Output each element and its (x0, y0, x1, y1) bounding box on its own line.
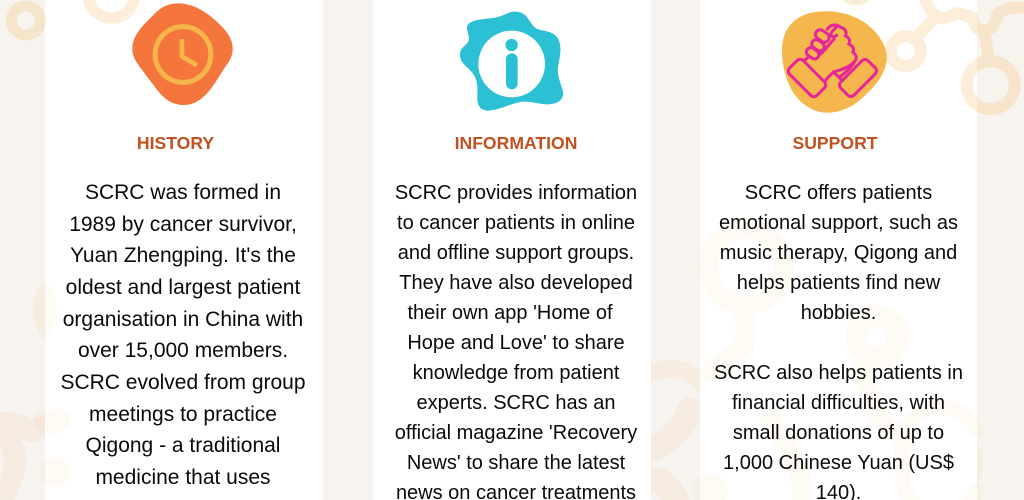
text: support: hobbies. (801, 302, 876, 324)
text: support: financial difficulties, with (732, 392, 945, 414)
text: support: helps patients find new (737, 272, 940, 294)
text: information (395, 182, 638, 500)
heading: information: INFORMATION (455, 132, 577, 152)
text: information: News' to share the latest (407, 452, 625, 474)
text: information: and offline support groups. (398, 242, 634, 264)
heading: support: SUPPORT (792, 132, 878, 152)
text: support: small donations of up to (733, 422, 944, 444)
text: information: SCRC provides information (395, 182, 637, 204)
text: history: Qigong - a traditional (86, 434, 280, 457)
text: information: They have also developed (399, 272, 633, 294)
text: history: organisation in China with (63, 308, 303, 331)
text: history: over 15,000 members. (78, 339, 288, 362)
text: support: emotional support, such as (719, 212, 958, 234)
heading: history: HISTORY (137, 132, 214, 152)
text: information: knowledge from patient (413, 362, 619, 384)
text: support: SCRC also helps patients in (714, 362, 963, 384)
text: history: SCRC was formed in (85, 181, 281, 204)
panel: support (700, 0, 977, 500)
text: support: music therapy, Qigong and (720, 242, 957, 264)
text: information: experts. SCRC has an (416, 392, 615, 414)
text: history: 1989 by cancer survivor, (69, 213, 297, 236)
panel: history (45, 0, 323, 500)
text: support: 1,000 Chinese Yuan (US$ (723, 452, 954, 474)
text: history: medicine that uses (95, 466, 271, 489)
text: support: SCRC offers patients (745, 182, 932, 204)
text: information: their own app 'Home of (407, 302, 613, 324)
text: history (60, 181, 306, 489)
text: support (714, 182, 963, 500)
text: history: Yuan Zhengping. It's the (70, 244, 296, 267)
text: history: oldest and largest patient (66, 276, 300, 299)
text: history: SCRC evolved from group (60, 371, 306, 394)
panel: information (373, 0, 651, 500)
text: information: Hope and Love' to share (407, 332, 625, 354)
text: information: official magazine 'Recovery (395, 422, 637, 444)
text: history: meetings to practice (89, 403, 277, 426)
text: information: to cancer patients in online (397, 212, 635, 234)
